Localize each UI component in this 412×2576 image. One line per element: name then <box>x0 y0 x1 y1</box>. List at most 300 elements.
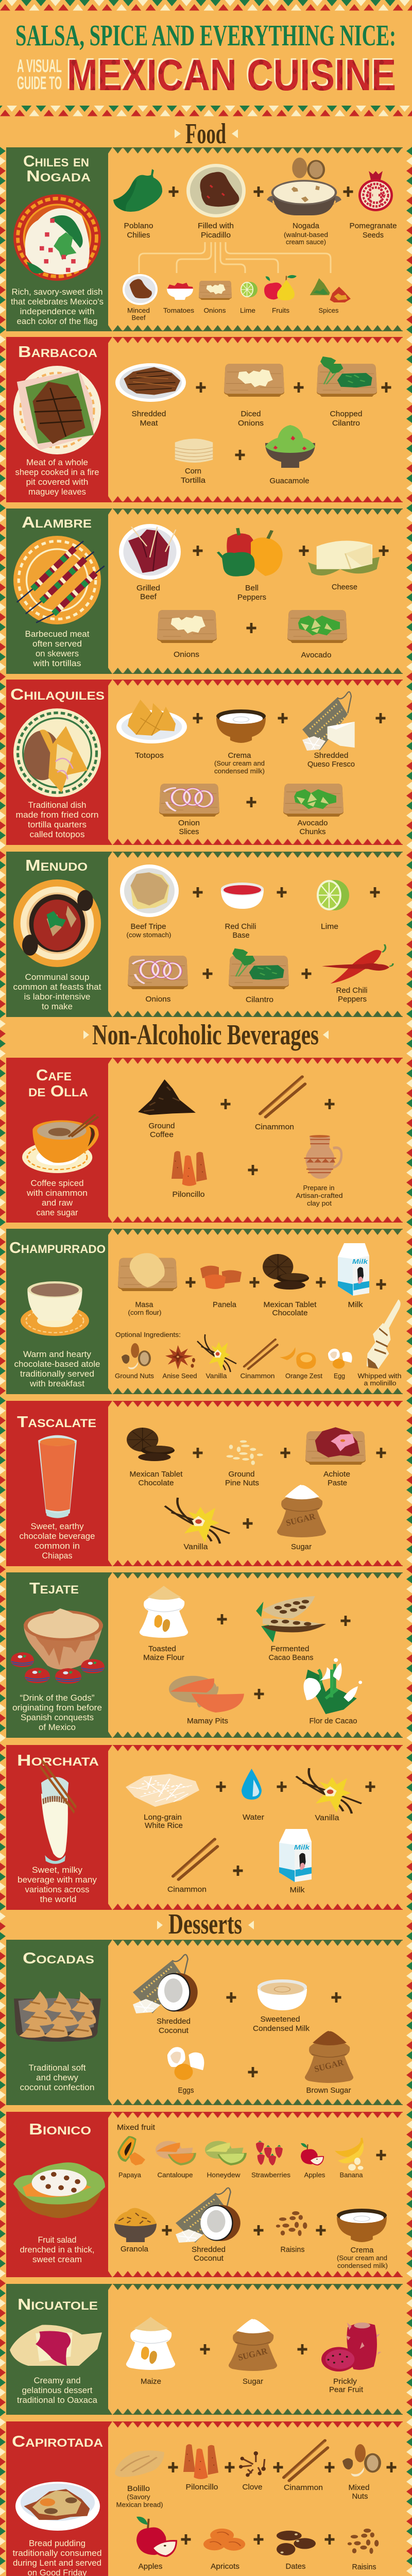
panel: Horchata: variations across <box>25 1885 90 1894</box>
card: Horchata <box>6 1745 403 1910</box>
ingredient: Pomegranate Seeds: Pomegranate <box>349 222 397 230</box>
ingredient: Panela: Panela <box>213 1300 237 1309</box>
plus <box>316 1277 325 1287</box>
plus <box>220 1099 231 1109</box>
ingredient: Cinammon: Cinammon <box>240 1372 275 1380</box>
ingredient: Apricots: Apricots <box>211 2562 239 2571</box>
ingredient: Prickly Pear Fruit: Pear Fruit <box>329 2385 364 2394</box>
plus <box>278 713 287 723</box>
panel: Chiles en Nogada: Chiles en <box>23 152 89 170</box>
ingredient: Pomegranate Seeds <box>349 171 397 240</box>
ingredient: Mixed Nuts: Nuts <box>352 2492 368 2501</box>
ingredient: Dates: Dates <box>285 2562 306 2571</box>
plus <box>294 382 304 393</box>
ingredient: Red Chili Base <box>221 883 264 940</box>
card: Capirotada <box>6 2421 403 2576</box>
ingredient: Mexican Tablet Chocolate: Chocolate <box>138 1479 174 1487</box>
ingredient: Ground Nuts <box>115 1343 154 1380</box>
ingredient: Egg <box>328 1349 352 1380</box>
ingredient: Diced Onions: Diced <box>241 410 261 418</box>
panel: Chiles en Nogada: Nogada <box>26 167 91 185</box>
ingredient: Minced Beef: Beef <box>132 314 146 321</box>
card: Tejate <box>6 1572 403 1738</box>
ingredient: Mamay Pits: Mamay Pits <box>187 1717 228 1725</box>
ingredient: Fruits: Fruits <box>272 307 290 314</box>
ingredient: Papaya: Papaya <box>118 2171 142 2179</box>
ingredient: Tomatoes: Tomatoes <box>163 307 195 314</box>
ingredient: Red Chili Peppers <box>322 944 393 1004</box>
plus <box>302 969 311 979</box>
ingredient: Grilled Beef: Beef <box>140 592 157 601</box>
panel: Tascalate: Tascalate <box>17 1413 96 1431</box>
ingredient: Milk: Milk <box>348 1300 363 1309</box>
ingredient: Fermented Cacao Beans: Fermented <box>271 1645 309 1653</box>
ingredient: Ground Coffee: Coffee <box>150 1130 174 1139</box>
ingredient: Cinammon: Cinammon <box>284 2483 323 2492</box>
ingredient: Bolillo: Mexican bread) <box>116 2501 163 2509</box>
panel: Cocadas: Traditional soft <box>29 2063 86 2073</box>
ingredient: Whipped with a molinillo: Whipped with <box>357 1372 402 1380</box>
panel: Champurrado: Warm and hearty <box>23 1349 92 1359</box>
plus <box>273 2462 283 2472</box>
ingredient: Red Chili Base: Base <box>233 931 249 940</box>
ingredient: Cheese <box>308 540 380 591</box>
card: Cocadas <box>6 1940 403 2105</box>
panel: Bionico: Bionico <box>29 2120 91 2138</box>
ingredient: Achiote Paste: Paste <box>328 1479 347 1487</box>
panel: Bionico: drenched in a thick, <box>20 2245 95 2255</box>
plus <box>216 1782 226 1792</box>
ingredient: Shredded Meat: Shredded <box>132 410 166 418</box>
ingredient: Granola: Granola <box>121 2245 149 2253</box>
plus <box>316 2225 325 2235</box>
ingredient: Brown Sugar: Brown Sugar <box>306 2086 351 2095</box>
panel: Barbacoa: Barbacoa <box>18 343 97 361</box>
ingredient: Tomatoes <box>163 283 195 314</box>
panel: Menudo: is labor-intensive <box>24 992 91 1002</box>
ingredient: Banana <box>335 2138 364 2179</box>
card: Barbacoa <box>6 337 403 502</box>
ingredient: Bolillo <box>115 2450 164 2509</box>
panel: Cafe de Olla <box>6 1058 112 1223</box>
ingredient: Water: Water <box>243 1813 264 1822</box>
card: Champurrado <box>6 1229 403 1394</box>
panel: Chiles en Nogada: each color of the flag <box>16 316 98 326</box>
panel: Tejate: originating from before <box>12 1703 102 1713</box>
ingredient: Grilled Beef <box>119 524 181 601</box>
ingredient: Eggs: Eggs <box>178 2086 194 2095</box>
section heading: Desserts: Desserts <box>168 1908 242 1940</box>
decorative side border right <box>406 146 412 2576</box>
ingredient: Whipped with a molinillo: a molinillo <box>364 1379 397 1387</box>
panel: Tascalate: Sweet, earthy <box>31 1521 84 1531</box>
ingredient: Flor de Cacao <box>303 1658 362 1725</box>
ingredient: Apricots <box>203 2529 245 2571</box>
plus <box>253 2225 264 2235</box>
plus <box>332 1992 341 2003</box>
ingredient: Cinammon <box>284 2441 328 2492</box>
card: Chilaquiles <box>6 680 403 845</box>
plus <box>277 1782 286 1792</box>
panel: Chilaquiles: called totopos <box>30 829 84 839</box>
plus <box>370 887 380 897</box>
ingredient: Ground Pine Nuts: Ground <box>229 1470 254 1479</box>
panel: Champurrado: chocolate-based atole <box>14 1359 100 1369</box>
panel: Capirotada: Capirotada <box>12 2432 103 2450</box>
ingredient: Vanilla <box>197 1334 236 1380</box>
plus <box>376 713 385 723</box>
ingredient: Crema: condensed milk) <box>337 2262 388 2269</box>
ingredient: Cilantro: Cilantro <box>246 995 273 1004</box>
ingredient: Raisins <box>348 2529 379 2571</box>
panel: Chilaquiles: tortilla quarters <box>28 820 87 829</box>
ingredient: Granola <box>114 2208 157 2253</box>
panel: Alambre: with tortillas <box>32 658 81 668</box>
ingredient: Fermented Cacao Beans: Cacao Beans <box>269 1653 313 1662</box>
plus <box>193 713 203 723</box>
panel: Horchata: beverage with many <box>18 1875 97 1885</box>
panel: Champurrado: Champurrado <box>9 1239 106 1257</box>
ingredient: Onion Slices: Slices <box>179 827 199 836</box>
card: Cafe de Olla <box>6 1058 403 1223</box>
panel: Tejate: of Mexico <box>39 1722 76 1732</box>
ingredient: Mexican Tablet Chocolate: Mexican Tablet <box>264 1300 317 1309</box>
ingredient: Long-grain White Rice: Long-grain <box>144 1813 182 1822</box>
ingredient: Brown Sugar: SUGAR <box>313 2057 345 2074</box>
panel: Horchata: Horchata <box>17 1751 99 1769</box>
ingredient: Onions <box>199 281 232 314</box>
panel: Champurrado: with breakfast <box>29 1379 84 1388</box>
connector lines from picadillo <box>139 242 331 273</box>
panel: Tascalate <box>6 1401 112 1566</box>
ingredient: Minced Beef <box>123 274 158 321</box>
ingredient: Apples <box>136 2517 177 2571</box>
panel: Cafe de Olla: with cinammon <box>26 1188 88 1198</box>
ingredient: Milk: Milk <box>352 1258 368 1265</box>
panel: Horchata: the world <box>40 1894 76 1904</box>
ingredient: Cantaloupe: Cantaloupe <box>158 2171 193 2179</box>
ingredient: Lime <box>240 282 258 314</box>
panel: Cafe de Olla: Cafe <box>36 1066 72 1084</box>
section heading: Non-Alcoholic Beverages: Non-Alcoholic Beverages <box>92 1019 319 1051</box>
ingredient: Vanilla: Vanilla <box>183 1543 208 1551</box>
panel: Barbacoa <box>6 337 112 502</box>
panel: Chiles en Nogada: that celebrates Mexico's <box>11 297 104 307</box>
panel: Champurrado <box>6 1229 112 1394</box>
plus <box>324 2534 335 2545</box>
ingredient: Nogada: (walnut-based <box>284 231 328 239</box>
panel: Nicuatole: Nicuatole <box>18 2295 98 2313</box>
ingredient: Water <box>242 1769 264 1822</box>
panel: Capirotada: traditionally consumed <box>12 2548 102 2558</box>
ingredient: Dates <box>277 2531 316 2571</box>
plus <box>193 887 203 897</box>
label: Optional Ingredients: Optional Ingredients: <box>115 1331 181 1338</box>
section heading: Food: Food <box>185 118 226 150</box>
ingredient: Bolillo: Bolillo <box>127 2484 150 2493</box>
ingredient: Shredded Meat <box>115 363 186 428</box>
ingredient: Red Chili Base: Red Chili <box>225 922 256 931</box>
ingredient: Cheese: Cheese <box>332 583 357 591</box>
ingredient: Diced Onions <box>224 364 284 428</box>
ingredient: Maize: Maize <box>141 2377 161 2386</box>
plus <box>324 1099 335 1109</box>
ingredient: Red Chili Peppers: Peppers <box>338 995 367 1004</box>
plus <box>203 969 212 979</box>
ingredient: Milk <box>338 1243 369 1309</box>
ingredient: Onions: Onions <box>204 307 226 314</box>
panel: Champurrado: traditionally served <box>20 1369 94 1379</box>
ingredient: Panela <box>200 1266 242 1309</box>
ingredient: Shredded Coconut <box>133 1955 198 2035</box>
panel: Nicuatole <box>6 2284 112 2415</box>
panel: Cocadas: and chewy <box>36 2073 78 2082</box>
panel: Menudo <box>6 852 112 1017</box>
panel: Chilaquiles: Chilaquiles <box>10 685 105 703</box>
panel: Menudo: common at feasts that <box>13 982 101 992</box>
ingredient: Onions: Onions <box>145 995 171 1004</box>
ingredient: Shredded Coconut: Shredded <box>157 2017 191 2026</box>
ingredient: Toasted Maize Flour <box>140 1586 188 1662</box>
ingredient: Apples: Apples <box>138 2562 163 2571</box>
ingredient: Corn Tortilla: Tortilla <box>181 476 206 485</box>
ingredient: Milk <box>279 1829 312 1894</box>
ingredient: Avocado: Avocado <box>301 651 332 659</box>
ingredient: Mexican Tablet Chocolate: Mexican Tablet <box>130 1470 183 1479</box>
ingredient: Brown Sugar <box>305 2031 353 2095</box>
plus <box>248 2067 258 2077</box>
panel: Cocadas <box>6 1940 112 2105</box>
ingredient: Orange Zest: Orange Zest <box>285 1372 322 1380</box>
ingredient: Mixed Nuts <box>342 2444 381 2501</box>
ingredient: Sugar: SUGAR <box>285 1511 317 1528</box>
ingredient: Vanilla: Vanilla <box>315 1814 339 1822</box>
panel: Cafe de Olla: and raw <box>42 1198 73 1208</box>
ingredient: Cinammon: Cinammon <box>255 1123 294 1131</box>
plus <box>253 2534 264 2545</box>
plus <box>366 1782 375 1792</box>
ingredient: Grilled Beef: Grilled <box>136 584 160 592</box>
ingredient: Crema <box>214 709 266 775</box>
ingredient: Sugar: Sugar <box>291 1543 312 1551</box>
ingredient: Piloncillo: Piloncillo <box>172 1190 205 1199</box>
ingredient: Masa <box>118 1253 177 1316</box>
panel: Barbacoa: sheep cooked in a fire <box>15 467 99 477</box>
panel: Cocadas: coconut confection <box>20 2082 95 2092</box>
plus <box>381 382 391 393</box>
ingredient: Totopos <box>116 700 187 760</box>
ingredient: Vanilla: Vanilla <box>206 1372 227 1380</box>
ingredient: Bell Peppers: Bell <box>245 584 259 592</box>
ingredient: Shredded Coconut: Coconut <box>194 2254 224 2263</box>
ingredient: Raisins: Raisins <box>352 2563 376 2571</box>
ingredient: Filled with Picadillo <box>186 164 246 240</box>
ingredient: Shredded Meat: Meat <box>140 419 158 428</box>
plus <box>235 450 245 460</box>
ingredient: Cantaloupe <box>156 2141 196 2179</box>
ingredient: Ground Pine Nuts <box>225 1440 263 1487</box>
ingredient: Poblano Chilies: Chilies <box>127 231 150 240</box>
ingredient: Filled with Picadillo: Picadillo <box>201 231 231 240</box>
card: Menudo <box>6 852 403 1017</box>
ingredient: Mexican Tablet Chocolate <box>127 1428 183 1487</box>
ingredient: Crema <box>337 2209 388 2269</box>
label: Mixed fruit: Mixed fruit <box>117 2123 156 2132</box>
panel: Menudo: to make <box>42 1002 73 1011</box>
plus <box>298 2344 307 2354</box>
ingredient: Chopped Cilantro: Chopped <box>330 410 363 418</box>
ingredient: Piloncillo: Piloncillo <box>185 2483 218 2492</box>
panel: Menudo: Menudo <box>25 856 88 874</box>
ingredient: Mexican Tablet Chocolate <box>263 1254 317 1317</box>
ingredient: Beef Tripe: (cow stomach) <box>127 931 171 939</box>
ingredient: Crema: Crema <box>228 751 251 760</box>
ingredient: Toasted Maize Flour: Toasted <box>148 1645 176 1653</box>
ingredient: Corn Tortilla <box>175 438 213 485</box>
plus <box>168 2462 178 2472</box>
plus <box>343 187 353 197</box>
plus <box>253 187 264 197</box>
panel: Bionico <box>6 2112 112 2277</box>
ingredient: Prepare in artisan-crafted clay pot: clay pot <box>307 1199 332 1207</box>
plus <box>233 1866 243 1876</box>
ingredient: Diced Onions: Onions <box>238 419 264 428</box>
plus <box>217 1614 227 1624</box>
ingredient: Guacamole <box>265 425 315 485</box>
ingredient: Anise Seed <box>163 1345 197 1380</box>
ingredient: Bolillo: (Savory <box>127 2493 150 2501</box>
ingredient: Bell Peppers <box>218 528 283 602</box>
plus <box>243 1518 252 1529</box>
panel: Capirotada <box>6 2421 112 2576</box>
ingredient: Strawberries <box>251 2141 291 2179</box>
ingredient: Ground Coffee: Ground <box>148 1122 175 1130</box>
ingredient: Cilantro <box>229 948 289 1004</box>
ingredient: Crema: (Sour cream and <box>214 759 265 767</box>
ingredient: Avocado Chunks: Chunks <box>300 827 325 836</box>
ingredient: Shredded Coconut: Coconut <box>159 2026 189 2035</box>
ingredient: Fruits <box>264 275 297 314</box>
ingredient: Shredded Coconut <box>176 2188 241 2263</box>
ingredient: Anise Seed: Anise Seed <box>163 1372 197 1380</box>
panel: Tascalate: common in <box>35 1541 80 1551</box>
ingredient: Beef Tripe <box>120 865 179 939</box>
ingredient: Apples: Apples <box>304 2171 325 2179</box>
ingredient: Fermented Cacao Beans <box>256 1596 326 1662</box>
ingredient: Piloncillo <box>171 1151 207 1199</box>
plus <box>248 1165 258 1175</box>
plus <box>249 1277 260 1287</box>
ingredient: Ground Coffee <box>138 1079 196 1139</box>
ingredient: Sweetened Condensed Milk: Sweetened <box>261 2015 300 2024</box>
ingredient: Nogada: Nogada <box>293 222 320 230</box>
plus <box>376 1448 386 1458</box>
plus <box>162 2225 172 2235</box>
title block <box>15 19 396 100</box>
panel: Nicuatole: traditional to Oaxaca <box>17 2395 98 2405</box>
panel: Tejate <box>6 1572 112 1738</box>
ingredient: Long-grain White Rice <box>126 1774 199 1830</box>
plus <box>376 1279 386 1290</box>
ingredient: Shredded Queso Fresco <box>302 692 355 769</box>
panel: Tejate: Tejate <box>29 1579 79 1597</box>
ingredient: Shredded Queso Fresco: Shredded <box>314 751 348 760</box>
ingredient: Lime <box>317 880 349 931</box>
ingredient: Lime: Lime <box>240 307 255 314</box>
panel: Nicuatole: gelatinous dessert <box>22 2385 93 2395</box>
plus <box>181 2534 191 2545</box>
plus <box>280 1448 290 1458</box>
ingredient: Ground Nuts: Ground Nuts <box>115 1372 154 1380</box>
ingredient: Spices <box>310 278 351 314</box>
plus <box>341 1616 350 1626</box>
panel: Alambre: Barbecued meat <box>25 629 90 639</box>
ingredient: Sweetened Condensed Milk: Condensed Milk <box>253 2024 310 2033</box>
panel: Horchata: Sweet, milky <box>32 1865 83 1875</box>
ingredient: Ground Pine Nuts: Pine Nuts <box>225 1479 259 1487</box>
ingredient: Honeydew: Honeydew <box>207 2171 241 2179</box>
plus <box>193 1448 203 1458</box>
subtitle a visual guide to: GUIDE TO <box>17 73 62 93</box>
ingredient: Shredded Coconut: Shredded <box>192 2245 226 2254</box>
panel: Nicuatole: Creamy and <box>34 2376 80 2385</box>
ingredient: Sweetened Condensed Milk <box>253 1979 310 2033</box>
ingredient: Honeydew <box>205 2141 247 2179</box>
ingredient: Egg: Egg <box>334 1372 345 1380</box>
ingredient: Avocado Chunks: Avocado <box>298 819 328 827</box>
ingredient: Beef Tripe: Beef Tripe <box>131 922 166 931</box>
ingredient: Raisins <box>276 2211 307 2254</box>
plus <box>277 887 286 897</box>
ingredient: Onion Slices <box>159 784 219 836</box>
ingredient: Avocado Chunks <box>283 784 344 836</box>
ingredient: Crema: (Sour cream and <box>337 2254 387 2262</box>
plus <box>379 546 388 556</box>
ingredient: Nogada: cream sauce) <box>286 238 326 246</box>
ingredient: Onions: Onions <box>174 650 199 659</box>
ingredient: Poblano Chilies <box>113 169 162 240</box>
ingredient: Pomegranate Seeds: Seeds <box>363 231 384 240</box>
card: Bionico <box>6 2112 403 2277</box>
plus <box>299 546 309 556</box>
ingredient: Whipped with a molinillo <box>357 1299 402 1387</box>
ingredient: Bell Peppers: Peppers <box>237 593 266 602</box>
ingredient: Prepare in artisan-crafted clay pot: Prepare in <box>303 1184 335 1192</box>
ingredient: Prepare in artisan-crafted clay pot <box>296 1135 343 1207</box>
plus <box>193 546 203 556</box>
ingredient: Prickly Pear Fruit <box>321 2323 381 2394</box>
plus <box>169 187 178 197</box>
plus <box>200 2344 210 2354</box>
panel: Cafe de Olla: de Olla <box>28 1082 88 1100</box>
panel: Barbacoa: pit covered with <box>26 477 89 487</box>
card: Nicuatole <box>6 2284 403 2415</box>
ingredient: Poblano Chilies: Poblano <box>124 222 153 230</box>
subtitle a visual guide to: A VISUAL <box>17 56 62 76</box>
plus <box>225 2462 235 2472</box>
plus <box>246 797 256 807</box>
ingredient: Totopos: Totopos <box>135 751 164 760</box>
ingredient: Vanilla <box>296 1768 362 1822</box>
ingredient: Eggs <box>167 2047 204 2095</box>
panel: Bionico: Fruit salad <box>38 2235 76 2245</box>
plus <box>254 1689 264 1699</box>
top zigzag band <box>0 0 412 11</box>
ingredient: Avocado <box>287 610 347 659</box>
panel: Chiles en Nogada: Rich, savory-sweet dish <box>11 287 103 297</box>
panel: Capirotada: Bread pudding <box>29 2538 85 2548</box>
ingredient: Toasted Maize Flour: Maize Flour <box>143 1653 184 1662</box>
